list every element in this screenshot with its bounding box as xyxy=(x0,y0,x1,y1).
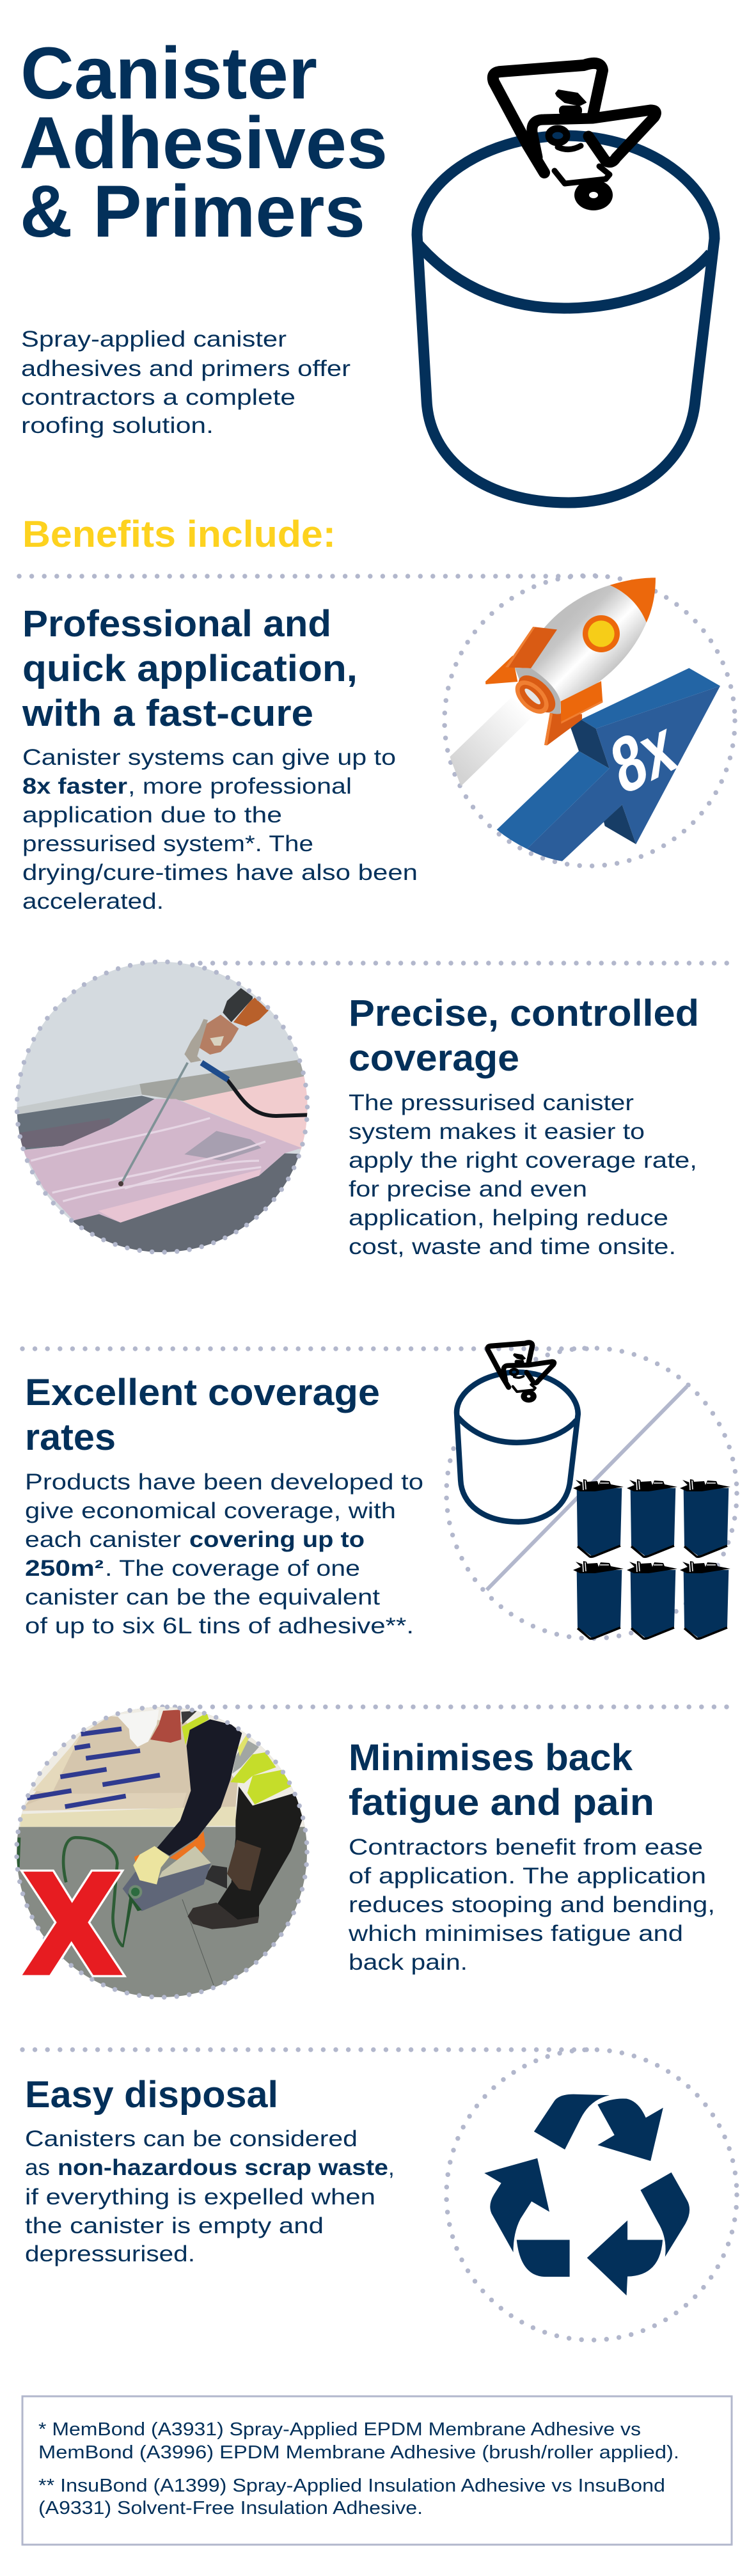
body text: . The coverage of one xyxy=(105,1556,360,1581)
heading: Precise, controlled xyxy=(349,993,699,1034)
body text: of application. The application xyxy=(349,1864,706,1889)
photo: worker bending xyxy=(17,1707,307,1997)
body text: 250m² xyxy=(25,1556,104,1581)
heading xyxy=(349,1737,654,1823)
body text: Contractors benefit from ease xyxy=(349,1835,703,1860)
body text: which minimises fatigue and xyxy=(348,1921,683,1946)
heading: with a fast-cure xyxy=(22,693,313,734)
title xyxy=(19,33,388,253)
icon: large canister xyxy=(417,63,714,503)
title: Adhesives xyxy=(19,102,388,184)
icon: small canister xyxy=(457,1342,578,1522)
footnote box xyxy=(22,2396,732,2545)
intro text: contractors a complete xyxy=(21,385,295,410)
body text: back pain. xyxy=(349,1950,468,1975)
heading xyxy=(22,603,358,734)
panel: controlled coverage xyxy=(10,956,699,1263)
body text: Canister systems can give up to xyxy=(22,745,396,770)
body text: non-hazardous scrap waste xyxy=(58,2155,388,2180)
body text: reduces stooping and bending, xyxy=(349,1892,715,1917)
heading xyxy=(349,993,699,1079)
body text: pressurised system*. The xyxy=(22,831,313,856)
arrow label: 8x xyxy=(603,701,684,812)
body text: as xyxy=(25,2155,50,2180)
body text xyxy=(25,1470,423,1638)
heading: Easy disposal xyxy=(25,2074,278,2116)
title: Canister xyxy=(20,33,317,114)
footnote box: (A9331) Solvent-Free Insulation Adhesive. xyxy=(38,2498,423,2518)
body text: if everything is expelled when xyxy=(25,2185,375,2210)
body text: depressurised. xyxy=(25,2242,195,2266)
intro text: adhesives and primers offer xyxy=(21,356,350,381)
footnote box: ** InsuBond (A1399) Spray-Applied Insulation Adhesive vs InsuBond xyxy=(38,2476,665,2496)
heading xyxy=(25,1372,380,1458)
dotted circle xyxy=(17,962,307,1252)
heading: Excellent coverage xyxy=(25,1372,380,1413)
heading: Professional and xyxy=(22,603,331,645)
body text: give economical coverage, with xyxy=(25,1498,396,1523)
photo: spraying adhesive xyxy=(17,962,307,1252)
heading: fatigue and pain xyxy=(349,1782,654,1823)
intro text: Spray-applied canister xyxy=(21,327,287,352)
body text: 8x faster xyxy=(22,774,127,799)
body text xyxy=(348,1835,715,1975)
body text: each canister xyxy=(25,1527,181,1552)
panel: coverage rates xyxy=(25,1342,737,1638)
panel: back fatigue xyxy=(10,1701,715,2008)
body text: the canister is empty and xyxy=(25,2213,324,2238)
subheading: benefits: Benefits include: xyxy=(22,514,336,555)
intro text xyxy=(21,327,350,438)
dotted circle xyxy=(17,1707,307,1997)
icon: rocket and 8x arrow xyxy=(450,577,720,861)
body text: accelerated. xyxy=(22,889,164,914)
title: & Primers xyxy=(20,171,365,253)
icon: recycling symbol xyxy=(484,2094,689,2295)
body text: Products have been developed to xyxy=(25,1470,423,1495)
body text xyxy=(349,1090,697,1259)
dotted circle xyxy=(446,1348,737,1638)
body text: of up to six 6L tins of adhesive**. xyxy=(25,1614,414,1638)
body text: apply the right coverage rate, xyxy=(349,1148,697,1173)
icon: canister nozzle xyxy=(493,63,656,210)
dotted circle xyxy=(445,576,735,866)
body text: system makes it easier to xyxy=(349,1119,645,1144)
body text: canister can be the equivalent xyxy=(25,1585,380,1610)
heading: rates xyxy=(25,1417,116,1458)
icon: six tins xyxy=(573,1479,730,1638)
heading: coverage xyxy=(349,1037,519,1079)
body text xyxy=(25,2126,395,2266)
dotted circle xyxy=(446,2050,737,2340)
panel: easy disposal xyxy=(25,2050,737,2340)
footnote box: * MemBond (A3931) Spray-Applied EPDM Membrane Adhesive vs xyxy=(38,2419,641,2440)
panel: fast application xyxy=(22,576,735,914)
body text xyxy=(22,745,418,914)
divider line: canister vs tins xyxy=(487,1386,687,1590)
heading: Minimises back xyxy=(349,1737,633,1779)
body text: covering up to xyxy=(189,1527,365,1552)
body text: cost, waste and time onsite. xyxy=(349,1234,676,1259)
footnote box: MemBond (A3996) EPDM Membrane Adhesive (brush/roller applied). xyxy=(38,2442,679,2463)
body text: Canisters can be considered xyxy=(25,2126,358,2151)
intro text: roofing solution. xyxy=(21,413,214,438)
icon: red X xyxy=(20,1871,125,1976)
body text: , xyxy=(388,2155,395,2180)
body text: The pressurised canister xyxy=(349,1090,634,1115)
body text: drying/cure-times have also been xyxy=(22,860,418,885)
heading: quick application, xyxy=(22,648,358,689)
body text: application due to the xyxy=(22,803,282,828)
body text: for precise and even xyxy=(349,1177,587,1202)
body text: application, helping reduce xyxy=(349,1206,668,1230)
body text: , more professional xyxy=(128,774,352,799)
